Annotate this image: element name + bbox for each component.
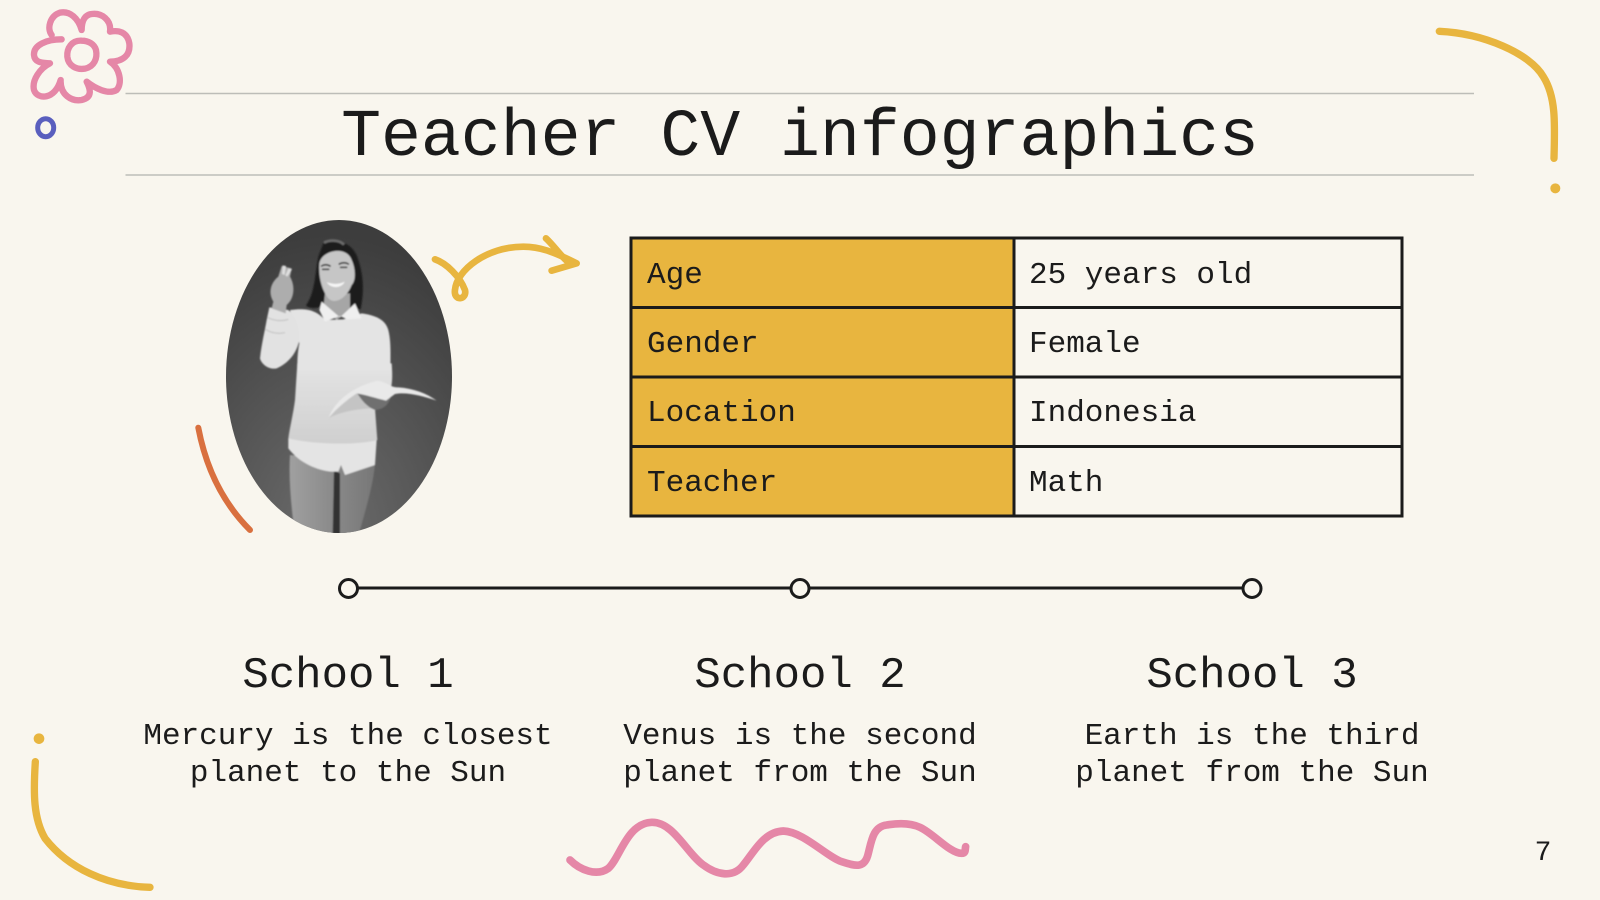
school 3: planet from the Sun: [1075, 756, 1429, 791]
title: Teacher CV infographics: [341, 100, 1259, 175]
photo: teacher in oval frame: [226, 220, 452, 537]
row: age: [647, 258, 1252, 293]
school 2: [623, 651, 977, 791]
icon: pink flower: [34, 12, 129, 100]
sweater: [290, 309, 391, 370]
row: teacher: [647, 466, 1103, 501]
brows and eyes: [322, 263, 348, 269]
face: [319, 251, 355, 301]
neck: [323, 293, 350, 320]
page number: 7: [1535, 838, 1551, 869]
icon: blue ring: [38, 119, 54, 137]
sweater lower: [288, 363, 392, 444]
timeline: [340, 580, 1261, 598]
lower body: [288, 363, 437, 537]
table grid: [630, 237, 1403, 517]
cuff: [265, 317, 288, 333]
school 2: School 2: [694, 651, 906, 701]
table: profile details: [630, 237, 1403, 517]
arrow: yellow curly arrow: [435, 238, 577, 298]
hand: [271, 266, 293, 313]
book: [328, 381, 437, 418]
raised arm: [260, 307, 300, 369]
row: location: Indonesia: [1029, 396, 1196, 431]
glasses on head: [324, 241, 344, 245]
row: gender: [647, 327, 1141, 362]
row: location: Location: [647, 396, 796, 431]
jeans: [290, 455, 375, 537]
row: location: [647, 396, 1196, 431]
icon: bottom left yellow curve: [34, 733, 150, 887]
upper body: [260, 241, 391, 370]
table labels background: [631, 238, 1014, 516]
icon: pink squiggle: [570, 822, 966, 874]
icon: orange arc: [198, 428, 250, 530]
row: teacher: Math: [1029, 466, 1103, 501]
title rule top: [126, 92, 1474, 94]
school 3: School 3: [1146, 651, 1358, 701]
school 1: School 1: [242, 651, 454, 701]
smile: [327, 282, 345, 287]
school 1: [143, 651, 553, 791]
school 1: planet to the Sun: [190, 756, 506, 791]
shirt hem: [288, 438, 377, 475]
row: teacher: Teacher: [647, 466, 777, 501]
row: age: 25 years old: [1029, 258, 1252, 293]
school 3: [1075, 651, 1429, 791]
holding hand: [357, 393, 391, 410]
school 2: Venus is the second: [623, 719, 977, 754]
school 3: Earth is the third: [1085, 719, 1419, 754]
title rule bottom: [126, 174, 1474, 176]
school 1: Mercury is the closest: [143, 719, 553, 754]
collar: [319, 302, 362, 322]
school 2: planet from the Sun: [623, 756, 977, 791]
hair: [306, 241, 363, 309]
icon: top right yellow curve: [1439, 31, 1560, 193]
row: gender: Gender: [647, 327, 759, 362]
row: age: Age: [647, 258, 703, 293]
row: gender: Female: [1029, 327, 1141, 362]
